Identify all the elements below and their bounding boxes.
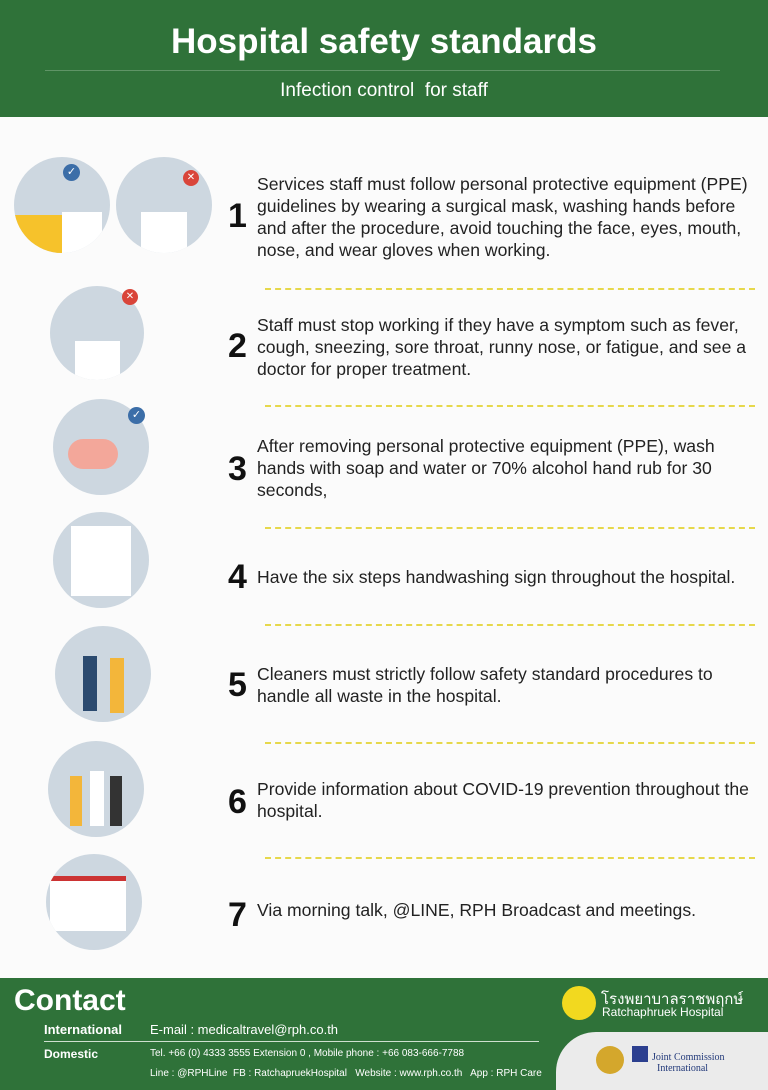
icon: information: [48, 741, 144, 837]
text: 6: [228, 783, 247, 821]
footer: Ratchaphruek Hospital: [602, 1005, 723, 1019]
text: Cleaners must strictly follow safety standard procedures to handle all waste in the hospital.: [257, 664, 713, 706]
icon: cross: ✕: [187, 172, 195, 183]
text: 2: [228, 327, 247, 365]
item 1: [228, 174, 748, 260]
icon: check: ✓: [67, 166, 76, 178]
footer: โรงพยาบาลราชพฤกษ์: [601, 991, 743, 1008]
item 7: [228, 896, 696, 934]
footer: Line : @RPHLine FB : RatchapruekHospital Website : www.rph.co.th App : RPH Care: [150, 1068, 542, 1079]
JCI badge: International: [657, 1063, 708, 1074]
icon: cleaners: [55, 626, 151, 722]
icon: broadcast: [46, 854, 142, 950]
text: 4: [228, 558, 247, 596]
item 5: [228, 664, 713, 706]
subtitle: Infection control for staff: [280, 80, 488, 101]
item 6: [228, 779, 749, 821]
logo: [562, 986, 596, 1020]
text: After removing personal protective equipment (PPE), wash hands with soap and water or 70% alcohol hand rub for 30 seconds,: [257, 436, 715, 500]
contact heading: Contact: [14, 984, 126, 1017]
title: Hospital safety standards: [171, 22, 597, 61]
footer: Domestic: [44, 1047, 98, 1061]
icon: sign: [53, 512, 149, 608]
text: 5: [228, 666, 247, 704]
icon: check: [63, 164, 80, 181]
footer: International: [44, 1022, 122, 1037]
icon: touching face: [116, 157, 212, 253]
text: 7: [228, 896, 247, 934]
text: Staff must stop working if they have a symptom such as fever, cough, sneezing, sore throat, runny nose, or fatigue, and see a doctor for proper treatment.: [257, 315, 746, 379]
icon: masks: [14, 157, 110, 253]
item 4: [228, 558, 735, 596]
item 3: [228, 436, 715, 500]
JCI badge: [556, 1032, 768, 1090]
footer: E-mail : medicaltravel@rph.co.th: [150, 1022, 338, 1037]
header: [0, 0, 768, 117]
text: Have the six steps handwashing sign throughout the hospital.: [257, 567, 735, 587]
icon: fever: [50, 286, 144, 380]
text: Via morning talk, @LINE, RPH Broadcast and meetings.: [257, 900, 696, 920]
JCI badge: Joint Commission: [652, 1052, 725, 1063]
text: 1: [228, 197, 247, 235]
text: 3: [228, 450, 247, 488]
footer: [0, 978, 768, 1090]
text: Provide information about COVID-19 prevention throughout the hospital.: [257, 779, 749, 821]
text: ✕: [126, 291, 134, 302]
item 2: [228, 315, 746, 379]
footer: Tel. +66 (0) 4333 3555 Extension 0 , Mobile phone : +66 083-666-7788: [150, 1048, 464, 1059]
text: Services staff must follow personal protective equipment (PPE) guidelines by wearing a surgical mask, washing hands before and after the procedure, avoid touching the face, eyes, mouth, nose, and wear gloves when working.: [257, 174, 748, 260]
icon: handwash: [53, 399, 149, 495]
icon: cross: [183, 170, 199, 186]
text: ✓: [132, 409, 141, 421]
